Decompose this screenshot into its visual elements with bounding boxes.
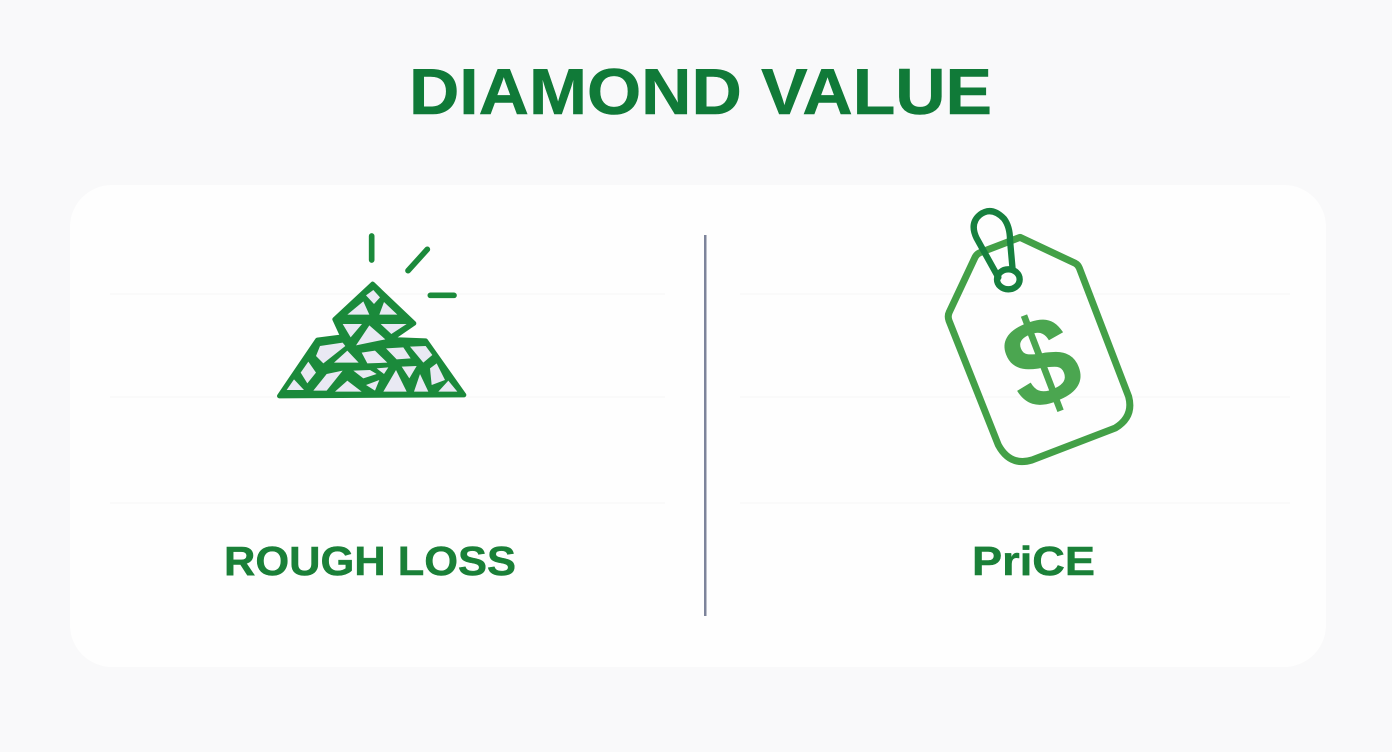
tag hole and loop	[974, 211, 1020, 289]
tag outline	[948, 237, 1130, 462]
panel: comparison card	[70, 185, 1326, 667]
label: price: PriCE	[972, 538, 1095, 584]
label: rough loss: ROUGH LOSS	[224, 538, 516, 584]
title: DIAMOND VALUE	[409, 55, 992, 128]
light facets	[287, 290, 457, 392]
icon: price tag	[948, 211, 1130, 462]
pile silhouette	[279, 284, 464, 396]
sparkles	[372, 236, 454, 295]
dollar sign: $	[984, 285, 1099, 440]
icon: rough diamond pile	[279, 236, 464, 396]
divider	[704, 235, 706, 616]
